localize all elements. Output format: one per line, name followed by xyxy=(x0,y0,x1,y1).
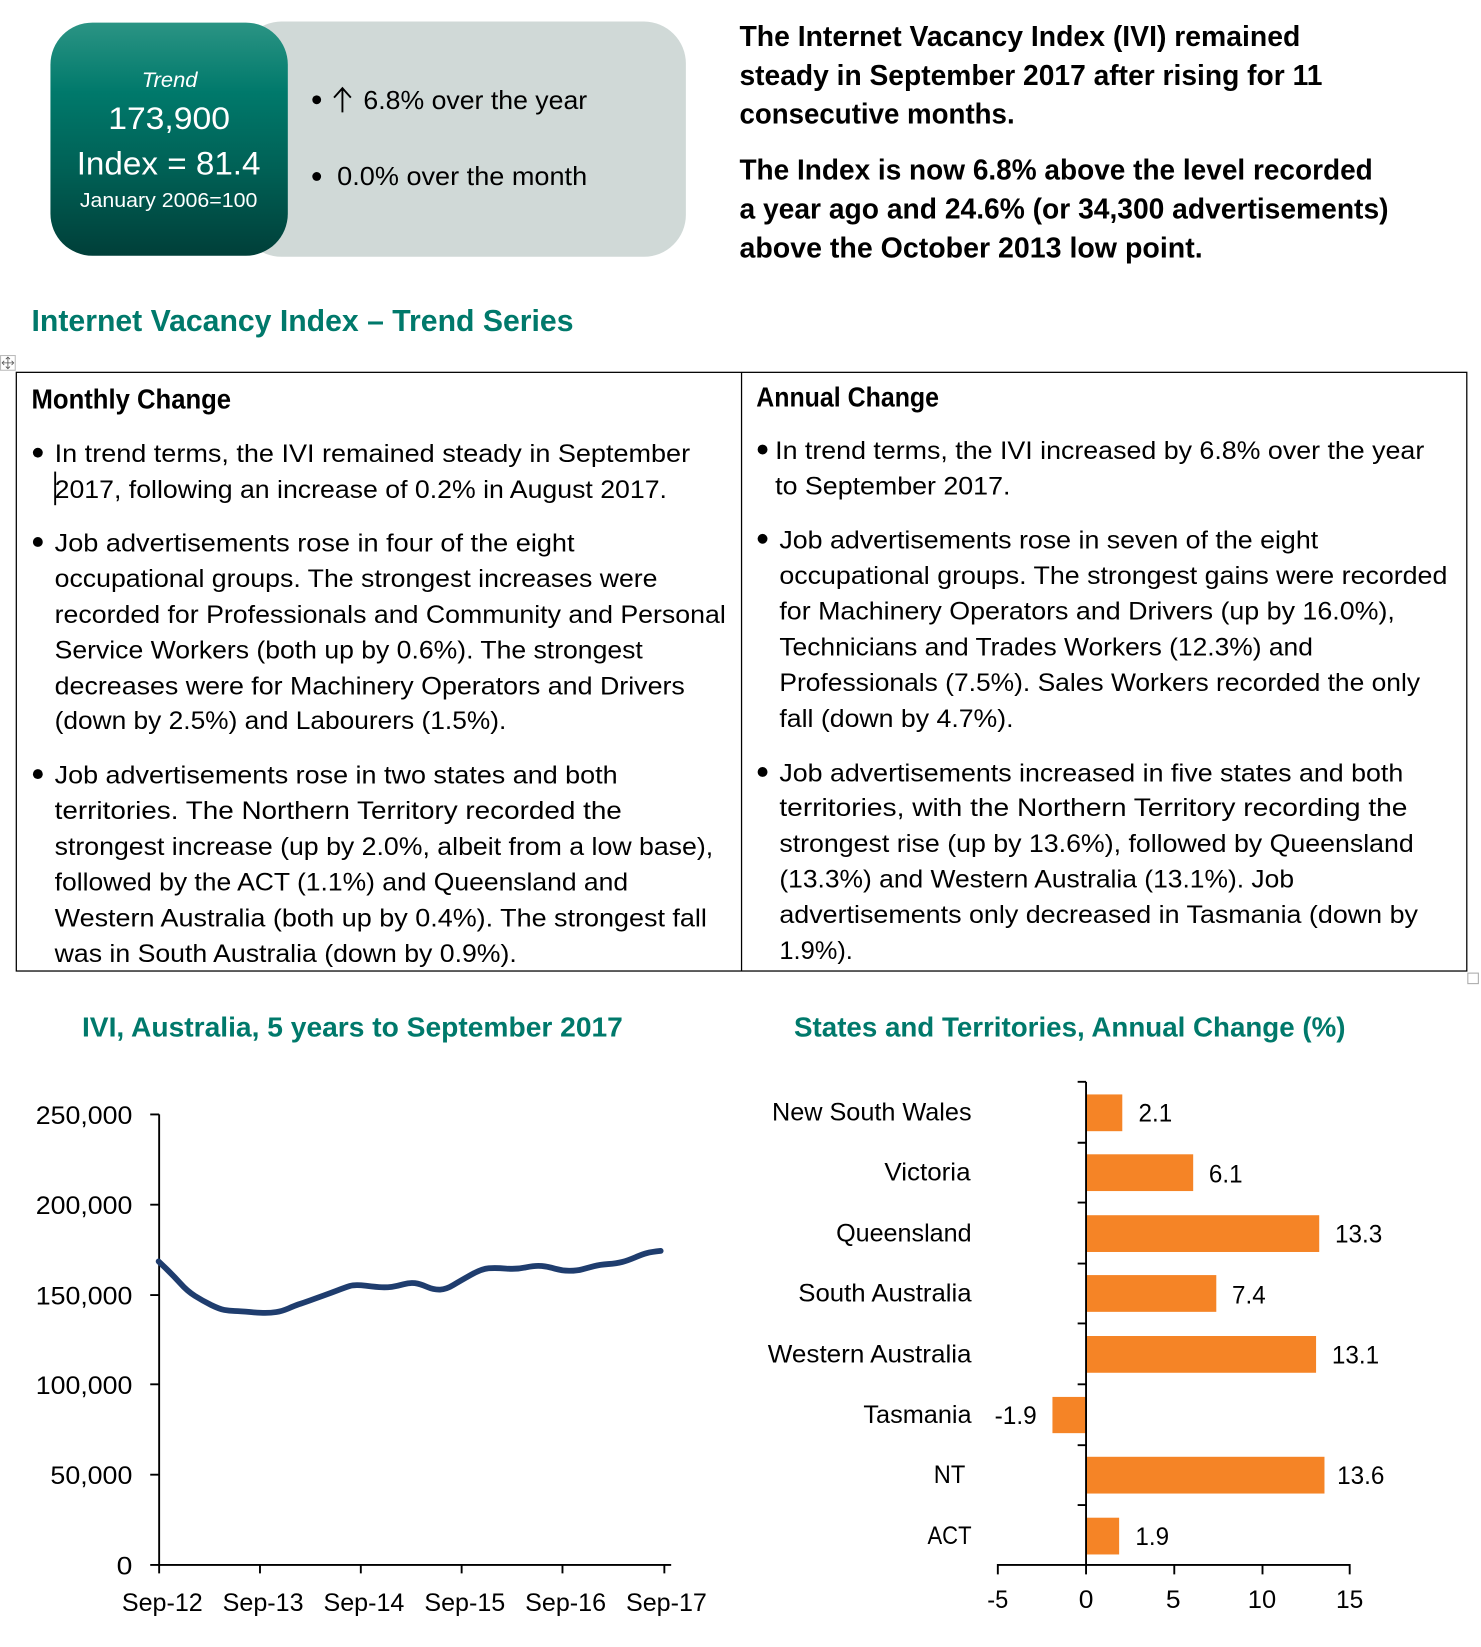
heading: trend series: Internet Vacancy Index – Trend Series xyxy=(32,304,573,338)
bars xyxy=(1052,1094,1324,1554)
text: monthly states bullet: Western Australia (both up by 0.4%). The strongest fall xyxy=(55,904,707,932)
text: monthly occupations bullet xyxy=(33,529,726,735)
heading: annual change: Annual Change xyxy=(756,381,939,412)
text: monthly states bullet: strongest increase (up by 2.0%, albeit from a low base), xyxy=(55,833,713,861)
x-axis labels: 10 xyxy=(1248,1587,1276,1614)
category labels: ACT xyxy=(927,1523,972,1550)
chart axes xyxy=(998,1082,1350,1574)
x-axis labels: 0 xyxy=(1079,1587,1093,1614)
text: annual states bullet: strongest rise (up by 13.6%), followed by Queensland xyxy=(779,830,1414,858)
icon: table resize handle xyxy=(1468,973,1478,984)
panel: trend figures: Index = 81.4 xyxy=(77,145,261,181)
text: annual occupations bullet: for Machinery Operators and Drivers (up by 16.0%), xyxy=(779,598,1395,626)
heading: monthly change: Monthly Change xyxy=(32,384,231,415)
value labels: 13.3 xyxy=(1335,1222,1382,1249)
x-axis labels xyxy=(987,1587,1363,1614)
text: monthly occupations bullet: (down by 2.5%) and Labourers (1.5%). xyxy=(55,707,506,735)
panel: trend figures: January 2006=100 xyxy=(80,189,257,212)
y-axis labels xyxy=(36,1103,132,1580)
category labels: Queensland xyxy=(836,1220,972,1247)
x-axis labels: Sep-15 xyxy=(424,1590,505,1617)
text: annual trend bullet: In trend terms, the IVI increased by 6.8% over the year xyxy=(775,437,1424,465)
panel: headline figures xyxy=(50,22,686,257)
bar chart: states and territories xyxy=(768,1082,1384,1614)
text block: summary: a year ago and 24.6% (or 34,300 advertisements) xyxy=(739,193,1389,225)
category labels: New South Wales xyxy=(772,1100,972,1127)
y-axis labels: 150,000 xyxy=(36,1283,132,1310)
text block: summary: steady in September 2017 after rising for 11 xyxy=(739,60,1322,92)
x-axis labels: 5 xyxy=(1166,1587,1181,1614)
text block: summary: consecutive months. xyxy=(739,98,1015,130)
text: monthly occupations bullet: Job advertisements rose in four of the eight xyxy=(55,529,575,557)
x-axis labels: Sep-13 xyxy=(223,1590,304,1617)
y-axis labels: 50,000 xyxy=(50,1463,132,1490)
panel: trend figures: Trend xyxy=(142,69,199,92)
icon: table move handle xyxy=(1,356,15,370)
column: monthly change xyxy=(32,384,726,968)
x-axis labels: -5 xyxy=(987,1587,1008,1614)
value labels: 13.6 xyxy=(1337,1463,1384,1490)
text: monthly states bullet: was in South Australia (down by 0.9%). xyxy=(54,940,517,968)
value labels: 2.1 xyxy=(1139,1101,1172,1128)
text block: summary xyxy=(739,21,1389,264)
text: monthly trend bullet: 2017, following an increase of 0.2% in August 2017. xyxy=(55,476,667,504)
text: monthly states bullet: followed by the ACT (1.1%) and Queensland and xyxy=(55,869,628,897)
x-axis labels: Sep-14 xyxy=(324,1590,404,1617)
panel: trend figures xyxy=(50,23,288,256)
y-axis labels: 250,000 xyxy=(36,1103,132,1130)
x-axis labels: Sep-17 xyxy=(626,1590,707,1617)
heading: line chart title: IVI, Australia, 5 years to September 2017 xyxy=(82,1012,623,1043)
value labels: -1.9 xyxy=(995,1403,1037,1430)
value labels: 1.9 xyxy=(1135,1524,1169,1551)
value labels xyxy=(995,1101,1384,1551)
text: annual occupations bullet: occupational groups. The strongest gains were recorded xyxy=(779,562,1447,590)
y-axis labels: 0 xyxy=(117,1553,132,1580)
text block: summary: above the October 2013 low point. xyxy=(739,232,1203,264)
text: monthly occupations bullet: recorded for Professionals and Community and Personal xyxy=(55,601,726,629)
text: monthly trend bullet: In trend terms, the IVI remained steady in September xyxy=(55,440,690,468)
text: monthly states bullet: territories. The Northern Territory recorded the xyxy=(55,797,622,825)
y-axis labels: 100,000 xyxy=(36,1373,132,1400)
text: annual occupations bullet xyxy=(758,526,1447,733)
column: annual change xyxy=(756,381,1447,965)
y-axis labels: 200,000 xyxy=(36,1193,132,1220)
line chart: IVI Australia xyxy=(36,1103,707,1617)
category labels: Tasmania xyxy=(863,1402,972,1429)
x-axis labels: Sep-16 xyxy=(525,1590,606,1617)
text: annual states bullet: (13.3%) and Western Australia (13.1%). Job xyxy=(779,866,1294,894)
text: annual occupations bullet: fall (down by 4.7%). xyxy=(779,705,1014,733)
category labels: NT xyxy=(934,1462,965,1489)
text block: summary: The Index is now 6.8% above the level recorded xyxy=(739,155,1373,187)
category labels: Western Australia xyxy=(768,1341,972,1368)
category labels: South Australia xyxy=(798,1280,972,1307)
text: monthly occupations bullet: Service Workers (both up by 0.6%). The strongest xyxy=(55,637,643,665)
text: monthly trend bullet xyxy=(33,440,690,505)
x-axis labels: 15 xyxy=(1336,1587,1363,1614)
x-axis labels xyxy=(122,1590,707,1617)
text: annual states bullet: advertisements only decreased in Tasmania (down by xyxy=(779,901,1418,929)
text: monthly occupations bullet: decreases were for Machinery Operators and Drivers xyxy=(55,672,685,700)
text: annual occupations bullet: Job advertisements rose in seven of the eight xyxy=(779,526,1318,554)
value labels: 13.1 xyxy=(1332,1342,1379,1369)
category labels xyxy=(768,1100,972,1550)
text: annual trend bullet xyxy=(758,437,1424,501)
text: annual states bullet: 1.9%). xyxy=(779,937,853,965)
text: change over the year: 6.8% over the year xyxy=(363,87,588,115)
heading: bar chart title: States and Territories, Annual Change (%) xyxy=(794,1012,1345,1043)
text: monthly states bullet: Job advertisements rose in two states and both xyxy=(55,762,618,790)
category labels: Victoria xyxy=(884,1160,971,1187)
text: change over the month: 0.0% over the month xyxy=(337,163,587,191)
text: annual occupations bullet: Professionals (7.5%). Sales Workers recorded the only xyxy=(779,669,1420,697)
x-axis labels: Sep-12 xyxy=(122,1590,203,1617)
panel: change table xyxy=(16,372,1467,971)
text block: summary: The Internet Vacancy Index (IVI) remained xyxy=(739,21,1300,53)
value labels: 6.1 xyxy=(1209,1162,1243,1189)
text: annual trend bullet: to September 2017. xyxy=(775,473,1010,501)
text: annual states bullet: Job advertisements increased in five states and both xyxy=(779,759,1403,787)
text: annual states bullet xyxy=(758,759,1418,965)
chart axes xyxy=(150,1114,671,1573)
text: monthly occupations bullet: occupational groups. The strongest increases were xyxy=(55,565,658,593)
text: monthly states bullet xyxy=(33,762,713,968)
text: annual occupations bullet: Technicians and Trades Workers (12.3%) and xyxy=(779,633,1313,661)
panel: trend figures: 173,900 xyxy=(108,100,230,136)
text: annual states bullet: territories, with the Northern Territory recording the xyxy=(779,794,1407,822)
value labels: 7.4 xyxy=(1232,1282,1266,1309)
data line xyxy=(159,1251,661,1313)
